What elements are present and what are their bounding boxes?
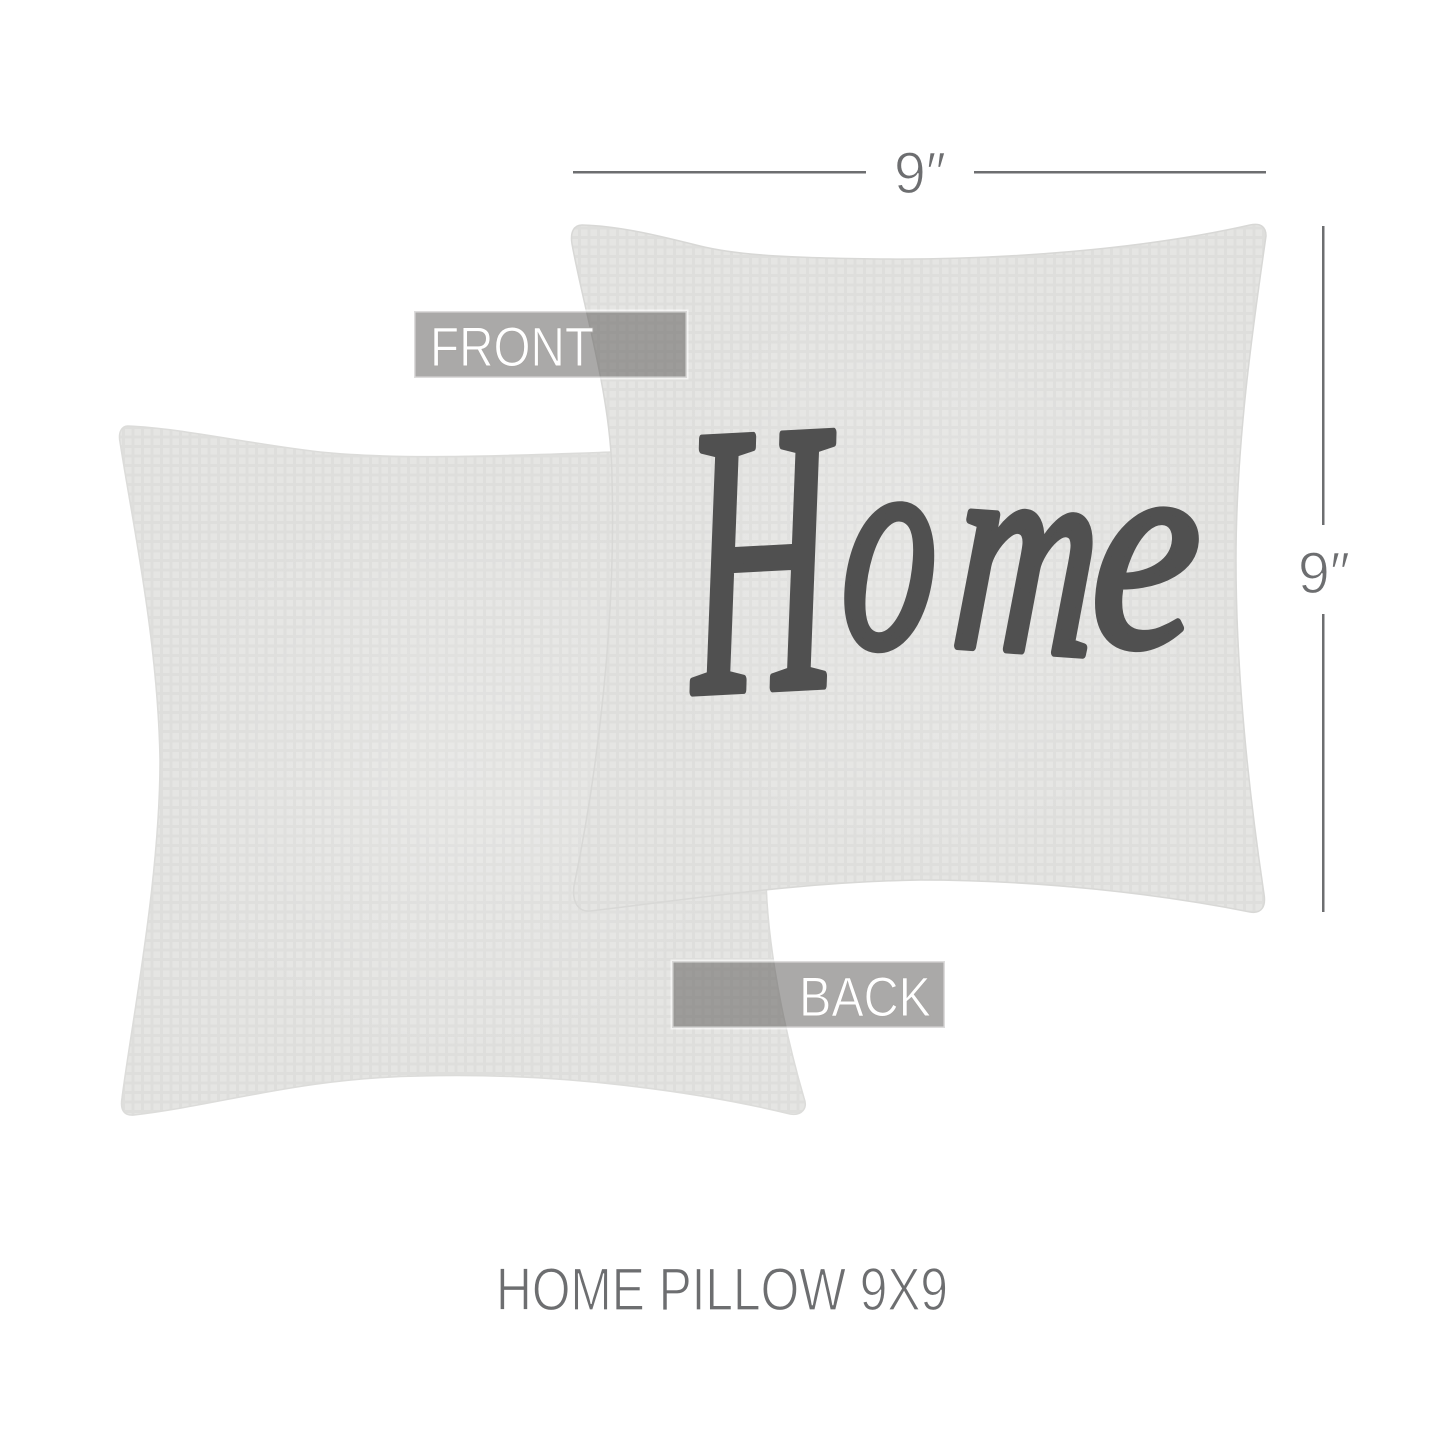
script word: Home: H	[673, 343, 855, 776]
label: back	[672, 961, 945, 1028]
height dimension: 9 inches: 9″	[1298, 541, 1350, 606]
back pillow	[119, 426, 805, 1115]
label: front: FRONT	[430, 315, 594, 378]
product title: HOME PILLOW 9X9	[496, 1256, 948, 1323]
label: front	[414, 311, 687, 378]
script word: Home: e	[1084, 386, 1211, 713]
script word: Home: o	[833, 377, 949, 714]
front pillow	[571, 224, 1266, 912]
script word: Home: m	[946, 387, 1110, 718]
width dimension: 9 inches: 9″	[894, 141, 946, 206]
label: back: BACK	[799, 965, 931, 1028]
script word: Home	[673, 343, 1211, 776]
